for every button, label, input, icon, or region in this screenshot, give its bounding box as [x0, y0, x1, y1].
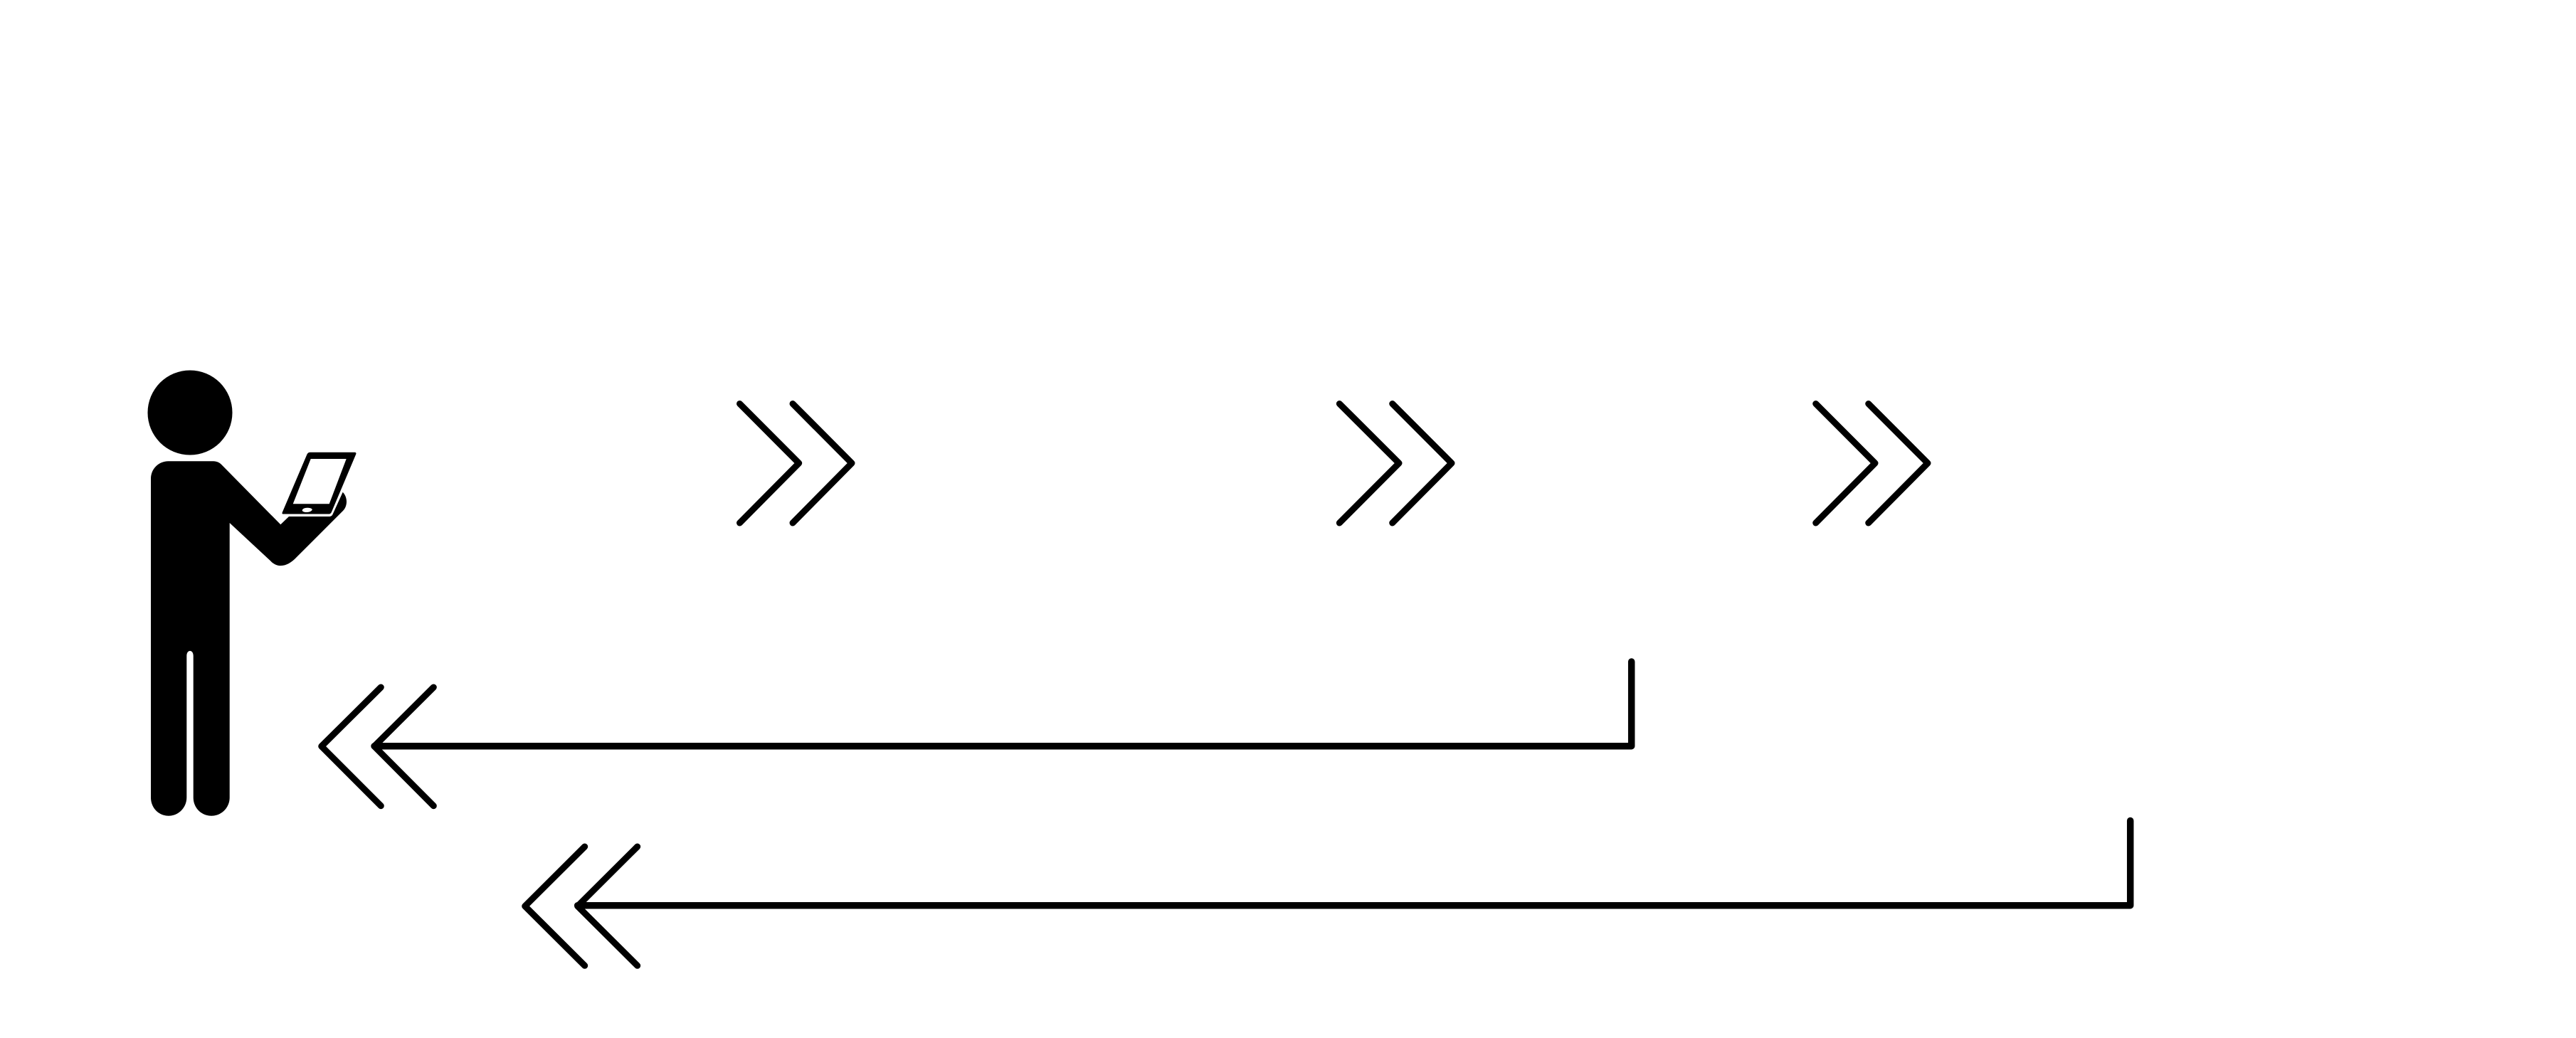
arrow: forward double chevron 1 — [740, 404, 852, 523]
person head — [148, 370, 232, 455]
icon: person holding tablet — [148, 370, 356, 816]
person body and arm — [151, 461, 347, 816]
arrow: return arrow to person — [322, 662, 1632, 806]
tablet — [282, 452, 356, 514]
arrow: second return arrow — [525, 821, 2131, 965]
arrow: forward double chevron 2 — [1339, 404, 1452, 523]
arrow: forward double chevron 3 — [1816, 404, 1928, 523]
